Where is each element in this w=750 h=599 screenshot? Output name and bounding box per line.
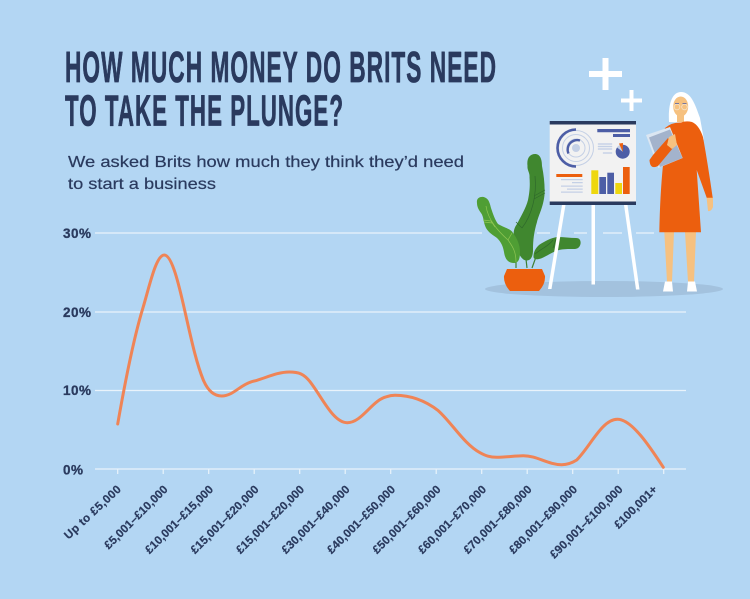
y axis labels: 0%: [63, 462, 84, 478]
pie chart: [616, 143, 630, 159]
legs: [664, 232, 696, 282]
hair: [669, 92, 704, 140]
tablet: [646, 127, 683, 168]
line chart: [62, 226, 686, 561]
x axis labels: £100,001+: [612, 483, 660, 531]
glasses: [674, 104, 687, 110]
pot: [504, 269, 545, 291]
text lines: [598, 144, 612, 154]
orange dress: [651, 121, 713, 232]
floor shadow: [485, 281, 723, 297]
x axis labels: £80,001–£90,000: [507, 483, 580, 556]
x axis labels: Up to £5,000: [62, 483, 124, 542]
x axis labels: £15,001–£20,000: [234, 483, 307, 556]
x axis labels: £70,001–£80,000: [461, 483, 535, 556]
x axis labels: £30,001–£40,000: [279, 483, 353, 556]
x axis labels: £90,001–£100,000: [547, 483, 626, 561]
forearm: [650, 138, 673, 167]
subtitle: to start a business: [68, 176, 216, 193]
subtitle: We asked Brits how much they think they’d need: [68, 154, 464, 171]
x axis labels: £10,001–£15,000: [143, 483, 216, 556]
subtitle: [68, 154, 464, 193]
radial chart: [558, 130, 594, 166]
data curve: [118, 255, 663, 467]
y axis labels: 10%: [63, 383, 92, 398]
y axis labels: 20%: [63, 305, 92, 320]
plant: [477, 154, 581, 291]
left hand: [667, 134, 677, 149]
x axis labels: £40,001–£50,000: [325, 483, 398, 556]
shoes: [663, 282, 697, 292]
x axis labels: £50,001–£60,000: [370, 483, 444, 556]
bar chart: [591, 167, 630, 194]
easel legs: [548, 205, 640, 290]
orange label and lines: [556, 174, 582, 177]
icon: large plus: [589, 58, 622, 90]
small heading bars: [597, 129, 630, 137]
title: [65, 43, 497, 136]
presentation board: [550, 121, 636, 205]
x axis labels: £5,001–£10,000: [102, 483, 171, 552]
x axis labels: £60,001–£70,000: [416, 483, 489, 556]
title: TO TAKE THE PLUNGE?: [65, 86, 344, 136]
icon: small plus: [621, 90, 642, 111]
illustration: presenter with board and plant: [477, 58, 723, 297]
y axis labels: 30%: [63, 226, 92, 241]
neck and face: [677, 113, 684, 122]
x axis labels: [62, 483, 660, 561]
right hand: [706, 197, 713, 211]
woman: [646, 92, 713, 292]
x axis labels: £15,001–£20,000: [188, 483, 262, 556]
y axis labels: [63, 226, 92, 478]
